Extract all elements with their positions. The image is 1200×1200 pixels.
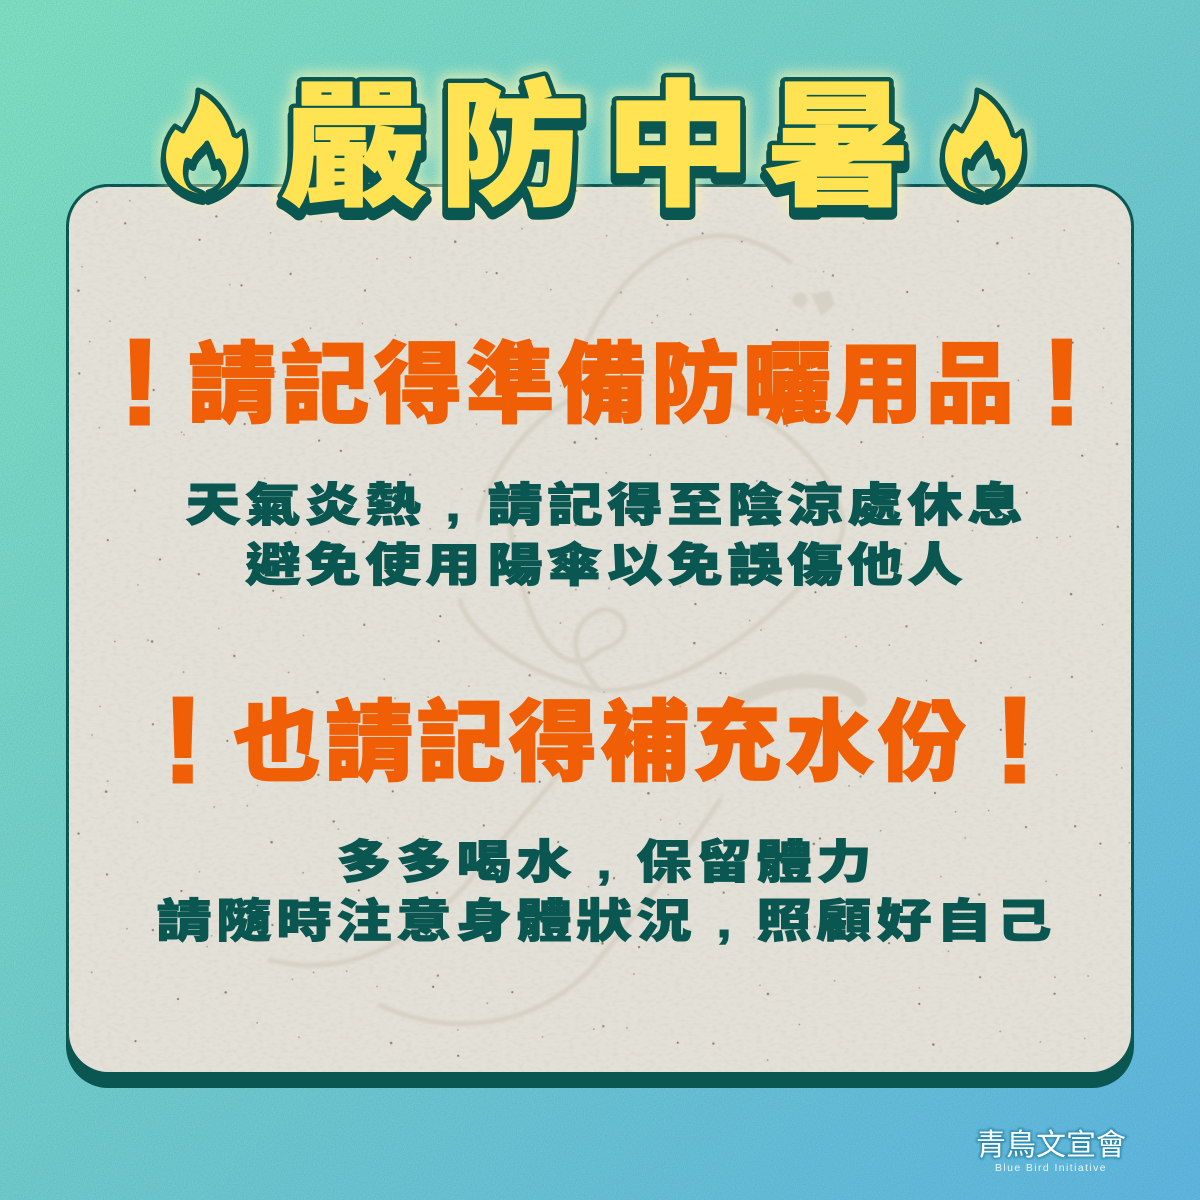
heading: hydration reminder bbox=[163, 672, 1035, 808]
icon: right flame bbox=[943, 90, 1024, 202]
panel face bbox=[68, 186, 1132, 1074]
exclamation mark: ! bbox=[995, 672, 1035, 808]
panel shadow bbox=[66, 198, 1134, 1088]
logo name: 青鳥文宣會 bbox=[976, 1129, 1126, 1162]
heading text: 請記得準備防曬用品 bbox=[188, 335, 1014, 434]
text block: hydration advice bbox=[157, 836, 1051, 947]
flame glow bbox=[943, 90, 1024, 197]
logo: Blue Bird Initiative bbox=[976, 1129, 1126, 1174]
exclamation mark: ! bbox=[1042, 314, 1082, 450]
flame shadow bbox=[943, 95, 1024, 202]
title: 嚴防中暑 bbox=[281, 71, 911, 230]
title fill thickening: 嚴防中暑 bbox=[281, 71, 911, 223]
flame face bbox=[164, 90, 245, 197]
heading text: 也請記得補充水份 bbox=[233, 693, 966, 792]
flame shadow bbox=[164, 95, 245, 202]
text block: shade advice bbox=[186, 479, 1022, 591]
flame face bbox=[943, 90, 1024, 197]
line: hot weather: 天氣炎熱,請記得至陰涼處休息 bbox=[186, 479, 1022, 531]
line: drink water: 多多喝水,保留體力 bbox=[337, 836, 871, 888]
title extruded shadow: 嚴防中暑 bbox=[281, 78, 911, 230]
line: avoid parasols: 避免使用陽傘以免誤傷他人 bbox=[246, 539, 963, 591]
flame glow bbox=[164, 90, 245, 197]
icon: left flame bbox=[164, 90, 245, 202]
title glow: 嚴防中暑 bbox=[281, 71, 911, 223]
watermark: bird line drawing bbox=[270, 236, 860, 1024]
exclamation mark: ! bbox=[120, 314, 160, 450]
heading: sunscreen reminder bbox=[120, 314, 1082, 450]
title outline and fill: 嚴防中暑 bbox=[281, 71, 911, 223]
panel: paper card bbox=[66, 186, 1134, 1088]
line: look after yourself: 請隨時注意身體狀況,照顧好自己 bbox=[157, 895, 1051, 947]
logo subtitle: Blue Bird Initiative bbox=[995, 1162, 1107, 1174]
exclamation mark: ! bbox=[163, 672, 203, 808]
logo glow: 青鳥文宣會 bbox=[976, 1129, 1126, 1162]
paper texture bbox=[68, 186, 1132, 1072]
